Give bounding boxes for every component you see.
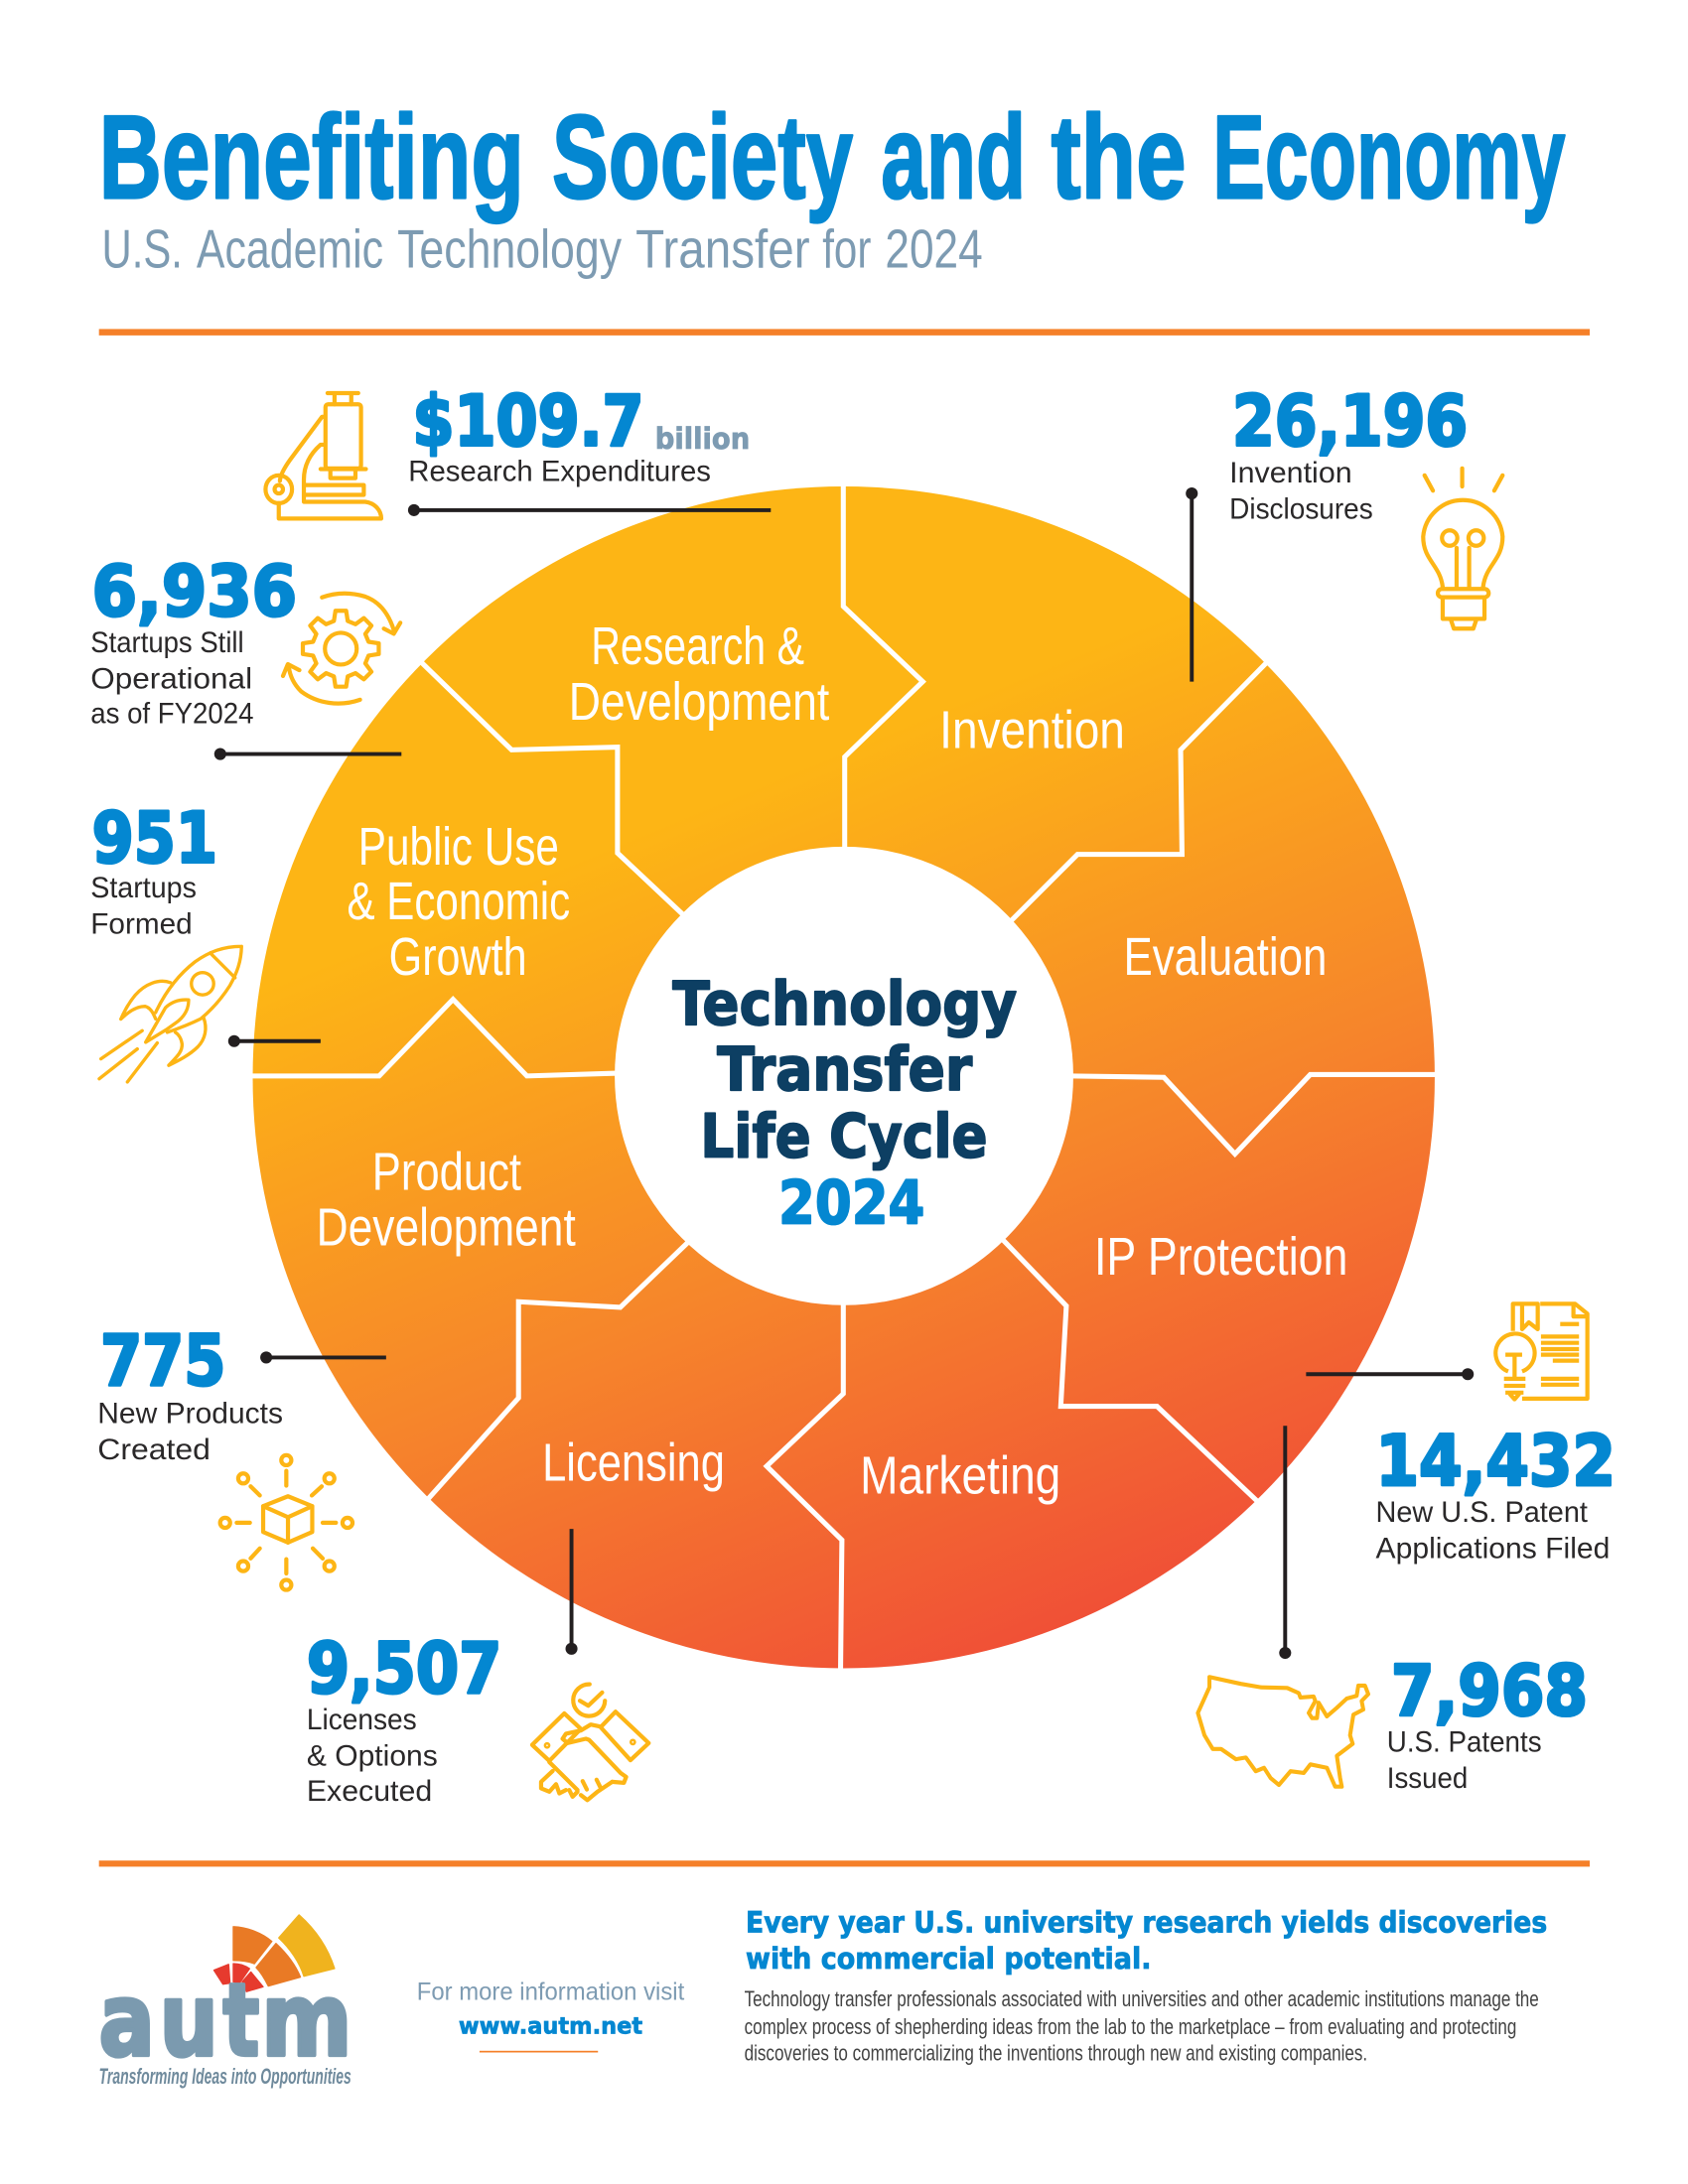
title: the — [1051, 91, 1187, 223]
stage: product development — [317, 1143, 576, 1257]
autm logo: m — [261, 1962, 352, 2079]
life cycle wheel — [246, 480, 1442, 1674]
more information call to action: www.autm.net — [459, 2013, 642, 2039]
stat: startups formed: Startups — [90, 872, 197, 904]
center hub — [615, 847, 1073, 1305]
stat: licenses and options executed: Executed — [307, 1775, 432, 1808]
stat: licenses and options executed: Licenses — [307, 1704, 417, 1736]
icon: microscope — [265, 393, 381, 518]
icon: united states map — [1197, 1677, 1368, 1787]
leader: startups formed — [228, 1035, 321, 1047]
subtitle: for — [822, 218, 871, 280]
stage: research and development: Research & — [591, 617, 804, 676]
stat: startups still operational: as of FY2024 — [90, 698, 253, 731]
stat: licenses and options executed: & Options — [307, 1740, 438, 1773]
stage: licensing: Licensing — [542, 1434, 725, 1493]
stat: new products created: New Products — [97, 1397, 283, 1430]
autm logo: a — [99, 1962, 155, 2079]
more information call to action: For more information visit — [417, 1979, 684, 2006]
stat: new products created — [97, 1320, 283, 1466]
leader: licenses — [566, 1529, 578, 1655]
leader: startups operational — [214, 749, 401, 760]
icon: handshake — [532, 1685, 648, 1800]
icon: rocket — [99, 946, 241, 1082]
stat: research expenditures — [408, 381, 750, 487]
summary heading — [746, 1905, 1547, 1976]
title: Society — [552, 91, 853, 223]
title: and — [881, 91, 1026, 223]
leader: invention — [1186, 487, 1197, 682]
stat: licenses and options executed: 9,507 — [307, 1628, 501, 1709]
stage: evaluation: Evaluation — [1123, 928, 1327, 987]
stage: research and development — [569, 617, 829, 732]
stage: invention: Invention — [939, 701, 1125, 759]
autm logo: u — [160, 1962, 218, 2079]
stat: invention disclosures: 26,196 — [1232, 381, 1468, 463]
icon: light bulb — [1423, 469, 1502, 628]
center hub: Technology — [672, 970, 1017, 1039]
stat: research expenditures: $109.7 — [413, 381, 644, 463]
stat: new products created: 775 — [100, 1320, 225, 1402]
subtitle: Transfer — [635, 218, 810, 280]
stat: startups formed: 951 — [92, 797, 217, 879]
center hub: Transfer — [717, 1035, 972, 1105]
stage: public use and economic growth: Public Use — [358, 818, 559, 877]
stat: invention disclosures — [1229, 381, 1468, 525]
subtitle: 2024 — [885, 218, 983, 280]
leader: new products — [260, 1351, 386, 1363]
autm logo: Transforming Ideas into Opportunities — [99, 2064, 352, 2089]
autm logo: t — [223, 1962, 259, 2079]
top divider — [99, 329, 1590, 336]
stat: startups still operational — [90, 551, 297, 731]
stage: public use and economic growth: & Economic — [348, 873, 570, 931]
stat: invention disclosures: Disclosures — [1229, 492, 1373, 525]
stat: patents issued — [1387, 1650, 1588, 1795]
center hub: 2024 — [778, 1169, 924, 1239]
stat: patents issued: U.S. Patents — [1387, 1726, 1542, 1759]
title: Benefiting — [99, 91, 524, 223]
bottom divider — [99, 1860, 1590, 1866]
summary heading: Every year U.S. university research yields discoveries — [746, 1905, 1547, 1939]
subtitle — [101, 218, 983, 280]
stat: licenses and options executed — [307, 1628, 501, 1808]
stat: startups still operational: 6,936 — [92, 551, 297, 632]
stage: public use and economic growth — [348, 818, 570, 987]
stat: new patent applications filed — [1376, 1421, 1616, 1566]
stat: invention disclosures: Invention — [1229, 457, 1352, 489]
stat: startups still operational: Startups Still — [90, 626, 244, 659]
leader: patent applications — [1306, 1368, 1474, 1380]
stage: marketing: Marketing — [860, 1446, 1060, 1505]
summary paragraph: discoveries to commercializing the inventions through new and existing companies. — [745, 2041, 1367, 2066]
stat: startups formed: Formed — [90, 908, 193, 941]
stage: product development: Product — [372, 1143, 521, 1201]
summary paragraph — [745, 1986, 1539, 2066]
title — [99, 91, 1565, 223]
stat: research expenditures: Research Expenditures — [408, 455, 711, 487]
stage: ip protection: IP Protection — [1094, 1228, 1347, 1287]
icon: cube network — [220, 1455, 352, 1590]
logo mark — [213, 1915, 335, 1991]
stat: startups formed — [90, 797, 217, 941]
center hub: Life Cycle — [700, 1102, 988, 1171]
stage: public use and economic growth: Growth — [389, 928, 527, 987]
stage: product development: Development — [317, 1198, 576, 1257]
stat: startups still operational: Operational — [90, 663, 252, 696]
stat: new patent applications filed: 14,432 — [1376, 1421, 1616, 1502]
summary heading: with commercial potential. — [746, 1942, 1152, 1976]
icon: gear with cycle arrows — [283, 594, 400, 704]
stat: patents issued: 7,968 — [1391, 1650, 1588, 1731]
icon: patent document — [1495, 1303, 1588, 1400]
more information call to action — [417, 1979, 684, 2052]
leader: research — [408, 504, 771, 516]
stat: patents issued: Issued — [1387, 1762, 1468, 1795]
stat: new products created: Created — [97, 1433, 211, 1466]
subtitle: Technology — [397, 218, 623, 280]
stat: new patent applications filed: New U.S. Patent — [1376, 1496, 1588, 1529]
subtitle: Academic — [197, 218, 383, 280]
autm logo — [99, 1915, 352, 2089]
subtitle: U.S. — [101, 218, 183, 280]
stage: research and development: Development — [569, 673, 829, 732]
stat: new patent applications filed: Applications Filed — [1376, 1533, 1610, 1566]
stat: research expenditures: billion — [655, 422, 750, 456]
leader: patents issued — [1279, 1426, 1291, 1659]
